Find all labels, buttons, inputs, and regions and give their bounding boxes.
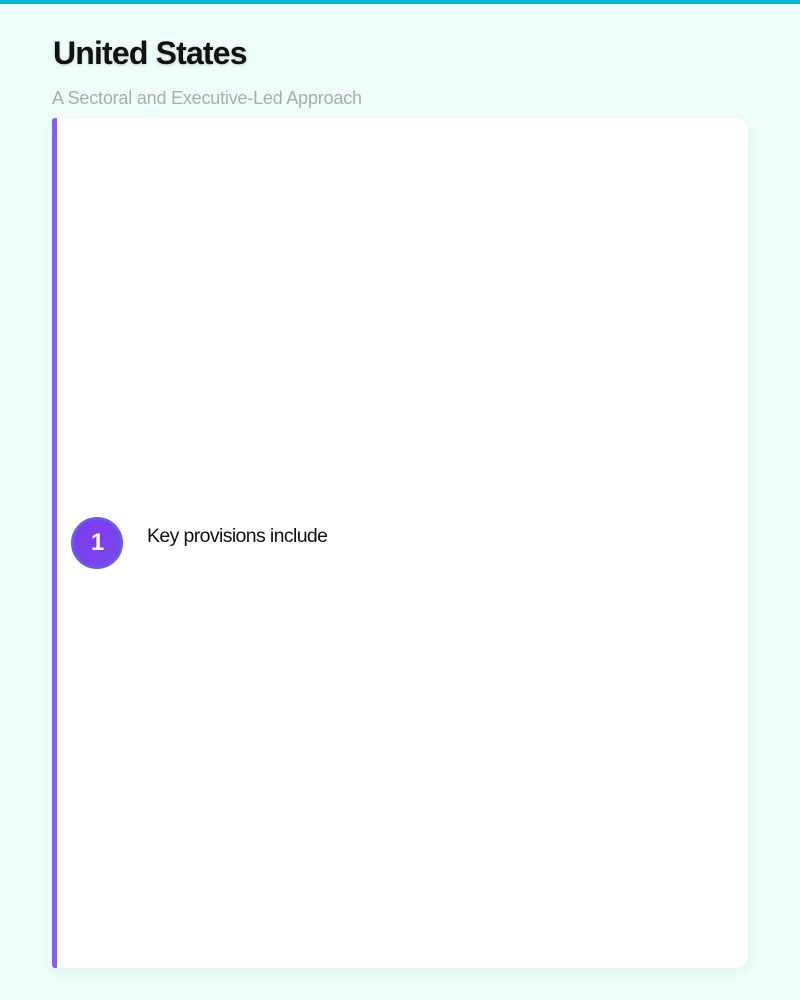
icon: number badge 1 xyxy=(71,517,123,569)
title: United States xyxy=(53,35,247,71)
subtitle: A Sectoral and Executive-Led Approach xyxy=(52,88,362,108)
top accent bar xyxy=(0,0,800,4)
purple accent bar xyxy=(52,118,57,968)
list item text: Key provisions include xyxy=(147,525,327,547)
icon: number badge 1: 1 xyxy=(91,529,104,556)
panel: key provisions card xyxy=(52,118,748,968)
